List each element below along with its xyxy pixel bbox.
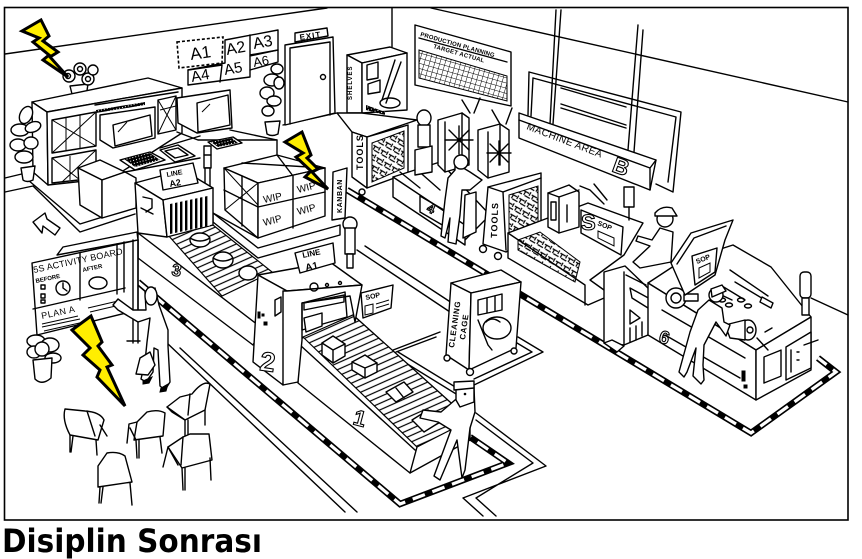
WIP storage table with boxes: WIP [262, 191, 283, 206]
machine 4 workstation [393, 162, 490, 245]
opened machine door with SOP [671, 220, 733, 295]
letter grid board A1–A6 [177, 30, 278, 86]
machining centre table with parts: SOP [596, 220, 613, 233]
large machine 6 body: 6 [657, 327, 672, 348]
letter grid board A1–A6: A5 [223, 59, 244, 79]
tools cart [337, 113, 417, 195]
factory walls [5, 8, 848, 315]
line A1 sign: A1 [304, 260, 320, 274]
kanban card board [332, 168, 347, 220]
line A1 sign: LINE [302, 247, 322, 260]
production planning board: TARGET ACTUAL [432, 44, 485, 65]
tools cart: TOOLS [355, 134, 365, 170]
line tower light left [204, 146, 211, 188]
lower conveyor belt section 1 [298, 315, 470, 473]
line tower light right [343, 217, 357, 268]
machine area B sign: B [609, 152, 633, 181]
plant beside door [260, 64, 284, 136]
machine 6 column with tools [604, 266, 652, 352]
cleaning cage cart: CLEANING [447, 300, 463, 348]
right signal tower [800, 272, 811, 315]
letter grid board A1–A6: A6 [252, 52, 270, 70]
large machine 6 body [648, 245, 818, 400]
hazard stripe: conveyor line [138, 282, 508, 504]
conveyor gate, pillar 2: 2 [258, 346, 277, 378]
production planning board: PRODUCTION PLANNING [419, 32, 495, 59]
chair 2 [127, 411, 165, 458]
SOP sheet on gate: SOP [365, 292, 381, 302]
SOP sheet on gate [361, 285, 393, 318]
tool shelving cabinet: SHELVES [348, 65, 354, 100]
cleaning cage cart: CAGE [458, 313, 471, 340]
machine area B sign [519, 113, 656, 190]
floor lane markings [5, 172, 546, 516]
tool shelving cabinet [347, 47, 407, 115]
line A2 sign [160, 163, 198, 190]
chair 4 [163, 434, 212, 490]
line A2 sign: LINE [166, 169, 183, 179]
conveyor worker with cap [420, 381, 475, 480]
opened machine door with SOP: SOP [695, 254, 712, 266]
machine area B hanging window frames [528, 10, 681, 192]
lightning bolt: chairs [72, 316, 125, 406]
5S activity board: BEFORE [35, 274, 61, 285]
exit door with sign [285, 28, 335, 125]
second tools cart [480, 173, 541, 260]
cleaning cage cart [444, 270, 521, 376]
letter grid board A1–A6: A2 [225, 39, 247, 59]
upper conveyor belt section 3: 3 [170, 260, 183, 281]
chair 3 [167, 383, 210, 437]
operator at control panel [633, 207, 677, 268]
machine area B sign: MACHINE AREA [525, 122, 604, 161]
plant under board [27, 335, 61, 382]
floor arrow [33, 213, 60, 235]
5S activity board [32, 232, 140, 343]
line A1 sign [295, 243, 335, 274]
computer desk box [78, 158, 200, 218]
caption title: Disiplin Sonrası [2, 522, 262, 559]
lower conveyor belt section 1: 1 [351, 405, 369, 432]
WIP storage table with boxes: WIP [296, 181, 317, 196]
letter grid board A1–A6: A1 [189, 42, 212, 64]
flower pot on cabinet [63, 63, 98, 100]
kanban card board: KANBAN [337, 179, 344, 213]
hazard stripe: machine area B [347, 190, 836, 433]
production planning board [415, 25, 511, 106]
line A2 sign: A2 [169, 177, 182, 189]
lightning bolt: flower pot [22, 20, 68, 77]
lightning bolt: WIP storage [285, 132, 328, 189]
WIP storage table with boxes: WIP [262, 214, 283, 229]
conveyor gate, pillar 2 [253, 262, 362, 385]
upper conveyor belt section 3 [138, 225, 272, 345]
left potted plant [10, 104, 42, 182]
machining centre table with parts: S [581, 210, 596, 235]
5S activity board: 5S ACTIVITY BOARD [32, 246, 124, 275]
WIP storage table with boxes: WIP [296, 203, 317, 218]
signal tower and star-wheel columns [415, 98, 512, 178]
exit door with sign: EXIT [299, 30, 322, 42]
machine 4 workstation: 4 [425, 200, 438, 217]
WIP storage table with boxes [213, 155, 340, 258]
second tools cart: TOOLS [489, 202, 500, 238]
first computer monitor and keyboard [100, 107, 195, 170]
machining centre table with parts [508, 184, 643, 305]
machine 6 operator [679, 285, 730, 384]
chair 5 [98, 452, 132, 505]
presenter with child [113, 287, 170, 392]
second computer monitor and keyboard [160, 90, 277, 149]
5S activity board: AFTER [82, 264, 104, 274]
worker at machine 4 [441, 155, 482, 244]
letter grid board A1–A6: A4 [190, 66, 211, 86]
left shelving cabinet [32, 78, 182, 185]
chair 1 [64, 409, 107, 455]
5S activity board: PLAN A [40, 304, 76, 321]
upper conveyor machine block with vent [135, 170, 213, 237]
letter grid board A1–A6: A3 [252, 33, 274, 53]
